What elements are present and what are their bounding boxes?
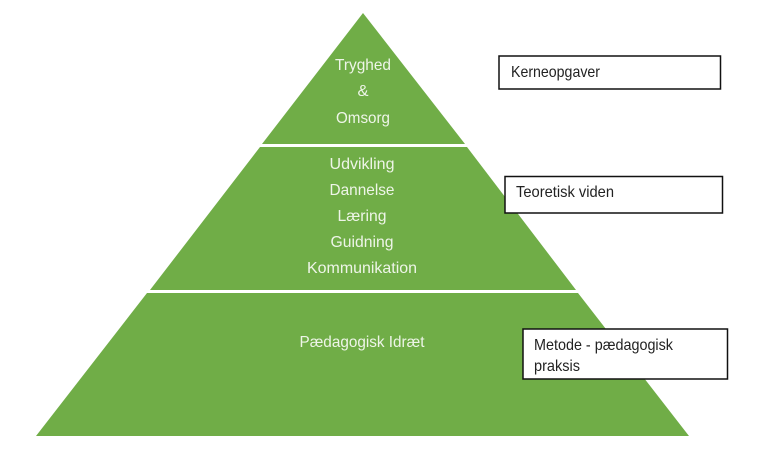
label box: Kerneopgaver: [499, 56, 720, 89]
label box: Metode - pædagogisk praksis: praksis: [534, 358, 580, 375]
label box: Metode - pædagogisk praksis: [523, 329, 728, 379]
label box: Teoretisk viden: Teoretisk viden: [516, 184, 614, 201]
label box: Metode - pædagogisk praksis: Metode - pædagogisk: [534, 337, 674, 354]
text: top tier: Omsorg: [336, 110, 390, 127]
label box: Teoretisk viden: [505, 176, 722, 213]
pyramid tier: top: [262, 13, 465, 144]
pyramid tier: bottom: [36, 293, 689, 436]
label box: Kerneopgaver: Kerneopgaver: [511, 64, 601, 81]
text: top tier: [335, 57, 391, 127]
text: middle tier: Kommunikation: [307, 260, 417, 277]
text: bottom tier: Pædagogisk Idræt: [300, 334, 425, 351]
pyramid tier: middle: [150, 147, 576, 290]
text: top tier: &: [358, 83, 369, 100]
text: middle tier: Dannelse: [330, 182, 395, 199]
text: top tier: Tryghed: [335, 57, 391, 74]
text: middle tier: Udvikling: [330, 156, 394, 173]
text: middle tier: [307, 156, 417, 277]
text: middle tier: Guidning: [330, 234, 394, 251]
text: middle tier: Læring: [338, 208, 386, 225]
